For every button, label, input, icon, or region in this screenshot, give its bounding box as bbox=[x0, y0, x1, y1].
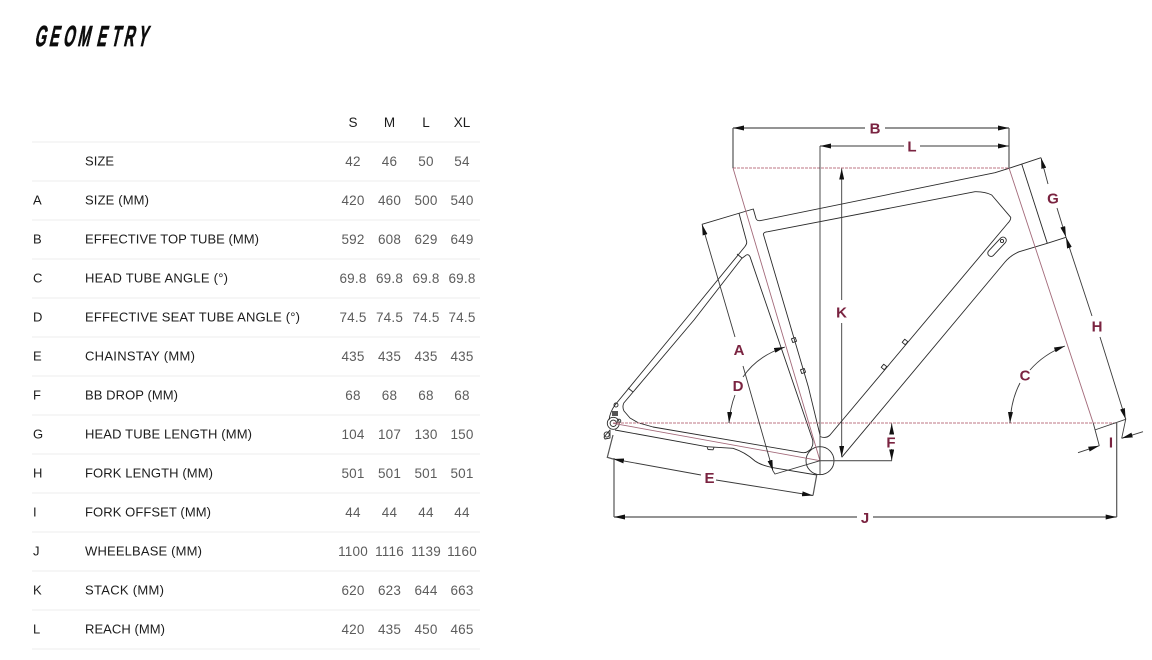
row: J: 1116 bbox=[375, 544, 404, 559]
row: F: 68 bbox=[345, 388, 361, 403]
icon: rear dropout bbox=[604, 403, 621, 439]
row: D: EFFECTIVE SEAT TUBE ANGLE (°) bbox=[85, 310, 300, 324]
row: I: FORK OFFSET (MM) bbox=[85, 504, 211, 520]
row: L: L bbox=[33, 622, 40, 636]
row: F: F bbox=[33, 388, 41, 402]
row: G: 130 bbox=[414, 427, 438, 442]
table header: L bbox=[422, 115, 430, 130]
row: E: 435 bbox=[414, 349, 438, 364]
row: A bbox=[33, 192, 474, 208]
row: F: 68 bbox=[382, 388, 397, 403]
row: E bbox=[33, 348, 474, 364]
row: D: 74.5 bbox=[412, 310, 440, 325]
row: A: SIZE (MM) bbox=[85, 192, 149, 208]
row: B: 592 bbox=[341, 232, 365, 247]
row: H bbox=[33, 466, 474, 481]
row: B bbox=[33, 232, 474, 247]
dimension I: I bbox=[1109, 434, 1113, 452]
row: J: 1139 bbox=[411, 544, 441, 559]
row: G: HEAD TUBE LENGTH (MM) bbox=[85, 426, 252, 442]
row: B: EFFECTIVE TOP TUBE (MM) bbox=[85, 232, 259, 246]
row: size: 54 bbox=[454, 154, 470, 169]
row: E: CHAINSTAY (MM) bbox=[85, 348, 195, 364]
dimension G bbox=[1041, 158, 1066, 237]
row: D: 74.5 bbox=[376, 310, 403, 325]
dimension D: D bbox=[733, 378, 744, 395]
bike frame diagram bbox=[604, 120, 1143, 527]
dimension C: C bbox=[1020, 368, 1031, 384]
row: J: 1160 bbox=[447, 544, 477, 559]
row: H: 501 bbox=[341, 466, 365, 481]
row: D: 74.5 bbox=[339, 310, 367, 325]
dimension F bbox=[820, 424, 896, 461]
row: F bbox=[33, 388, 470, 403]
row: L: 465 bbox=[450, 622, 474, 637]
row: B: 649 bbox=[450, 232, 474, 247]
row: F: 68 bbox=[454, 388, 470, 403]
row: B: B bbox=[33, 232, 42, 246]
row: D: D bbox=[33, 310, 42, 324]
row: size bbox=[85, 154, 470, 169]
table header: S bbox=[348, 115, 358, 130]
row: H: FORK LENGTH (MM) bbox=[85, 466, 213, 480]
dimension E: E bbox=[704, 470, 715, 487]
row: G: G bbox=[33, 426, 43, 442]
dimension F: F bbox=[886, 434, 896, 452]
row: I bbox=[33, 504, 470, 520]
row: L: 420 bbox=[341, 622, 365, 637]
row: I: 44 bbox=[454, 505, 470, 520]
row: K: STACK (MM) bbox=[85, 582, 164, 598]
row: C bbox=[33, 270, 476, 286]
row: L: 450 bbox=[414, 622, 438, 637]
red reference lines bbox=[613, 168, 1117, 461]
row: F: 68 bbox=[418, 388, 434, 403]
row: H: H bbox=[33, 466, 42, 480]
dimension L: L bbox=[907, 138, 917, 156]
row: J: J bbox=[33, 544, 40, 558]
row: B: 629 bbox=[414, 232, 438, 247]
dimension E bbox=[607, 435, 817, 496]
icon: cable port bbox=[986, 236, 1008, 258]
dimension H: H bbox=[1092, 318, 1102, 336]
row: I: 44 bbox=[382, 505, 397, 520]
row: D bbox=[33, 310, 476, 325]
dimension K: K bbox=[836, 304, 847, 322]
frame outline bbox=[609, 158, 1066, 475]
row: C: 69.8 bbox=[448, 271, 476, 286]
row: A: A bbox=[33, 192, 42, 208]
dimension G: G bbox=[1047, 190, 1059, 208]
row: K: 663 bbox=[450, 583, 474, 598]
row: size: SIZE bbox=[85, 154, 114, 168]
dimension B bbox=[733, 120, 1009, 168]
table header bbox=[348, 115, 471, 130]
row: K: 620 bbox=[341, 583, 365, 598]
table header: XL bbox=[454, 115, 471, 130]
dimension C bbox=[1010, 346, 1065, 423]
row: A: 540 bbox=[450, 193, 474, 208]
row: H: 501 bbox=[378, 466, 401, 481]
row: E: 435 bbox=[341, 349, 365, 364]
row: H: 501 bbox=[450, 466, 474, 481]
row: C: 69.8 bbox=[339, 271, 367, 286]
dimension H bbox=[1066, 237, 1126, 419]
row: F: BB DROP (MM) bbox=[85, 388, 178, 402]
row: K: K bbox=[33, 582, 42, 598]
row: I: I bbox=[33, 504, 37, 520]
row: I: 44 bbox=[345, 505, 361, 520]
row: C: C bbox=[33, 270, 42, 286]
row: B: 608 bbox=[378, 232, 401, 247]
row: K: 623 bbox=[378, 583, 401, 598]
row: G: 150 bbox=[450, 427, 474, 442]
row: A: 420 bbox=[341, 193, 365, 208]
row: K bbox=[33, 582, 474, 598]
row: I: 44 bbox=[418, 505, 434, 520]
dimension B: B bbox=[870, 120, 881, 138]
dimension D bbox=[729, 347, 785, 423]
row: J bbox=[33, 544, 477, 559]
row: size: 46 bbox=[382, 154, 397, 169]
row: K: 644 bbox=[414, 583, 438, 598]
row: G bbox=[33, 426, 474, 442]
row: G: 107 bbox=[378, 427, 401, 442]
dimension I bbox=[1078, 419, 1143, 453]
row: D: 74.5 bbox=[448, 310, 476, 325]
dimension A: A bbox=[734, 342, 745, 359]
row: A: 460 bbox=[378, 193, 401, 208]
row: H: 501 bbox=[414, 466, 438, 481]
row: E: 435 bbox=[378, 349, 401, 364]
row: size: 50 bbox=[418, 154, 434, 169]
row: L: 435 bbox=[378, 622, 401, 637]
table header: M bbox=[384, 115, 395, 130]
dimension J bbox=[614, 423, 1117, 527]
dimension J: J bbox=[861, 510, 869, 527]
icon: bottle bosses bbox=[707, 337, 908, 450]
row: L bbox=[33, 622, 474, 637]
row: A: 500 bbox=[414, 193, 438, 208]
row: G: 104 bbox=[341, 427, 365, 442]
title: GEOMETRY bbox=[33, 20, 153, 52]
row: E: 435 bbox=[450, 349, 474, 364]
row: E: E bbox=[33, 348, 42, 364]
row: J: WHEELBASE (MM) bbox=[85, 544, 202, 558]
row: C: 69.8 bbox=[376, 271, 403, 286]
row: C: 69.8 bbox=[412, 271, 440, 286]
dimension A bbox=[702, 224, 820, 474]
table: geometry sizes bbox=[32, 115, 480, 649]
row: size: 42 bbox=[345, 154, 361, 169]
row: J: 1100 bbox=[338, 544, 368, 559]
row: L: REACH (MM) bbox=[85, 622, 165, 636]
row: C: HEAD TUBE ANGLE (°) bbox=[85, 270, 228, 286]
